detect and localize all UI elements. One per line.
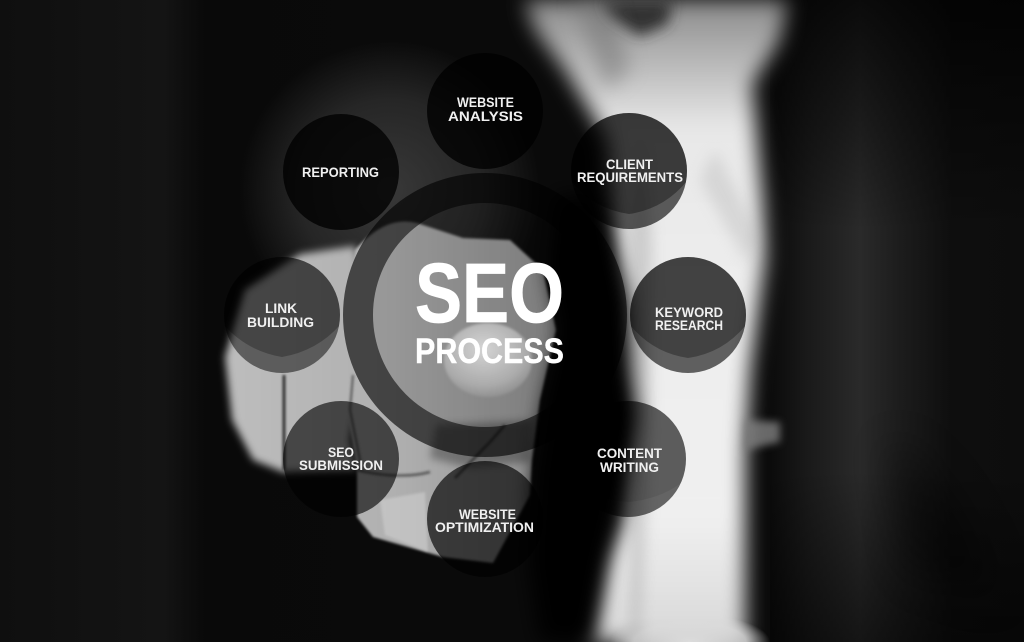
- label: keyword research: KEYWORD: [655, 305, 723, 320]
- label: website analysis: WEBSITE: [457, 95, 514, 110]
- label: link building: BUILDING: [247, 315, 314, 330]
- label: content writing: WRITING: [600, 460, 659, 475]
- bubble: reporting: [283, 114, 399, 230]
- label: link building: [247, 301, 314, 330]
- label: client requirements: [577, 157, 683, 185]
- bubble: content writing: [598, 401, 686, 517]
- blurred white shirt and collar: [524, 0, 788, 642]
- bubble: website optimization: [427, 461, 543, 577]
- label: website optimization: [435, 507, 534, 535]
- label: link building: LINK: [265, 301, 297, 316]
- label: seo submission: [299, 445, 383, 473]
- black sleeve shadow right of hand: [528, 195, 634, 642]
- label: website optimization: WEBSITE: [459, 507, 516, 522]
- label: keyword research: RESEARCH: [655, 318, 723, 333]
- label: website optimization: OPTIMIZATION: [435, 520, 534, 535]
- title: SEO PROCESS: SEO: [415, 246, 564, 340]
- central ring: inner disc: [373, 203, 597, 427]
- label: keyword research: [655, 305, 723, 333]
- label: seo submission: SUBMISSION: [299, 458, 383, 473]
- lower finger shade: [430, 420, 532, 468]
- icon: fingertip nail: [444, 323, 532, 397]
- label: reporting: REPORTING: [302, 165, 379, 180]
- label: content writing: CONTENT: [597, 446, 663, 461]
- label: website analysis: [448, 95, 523, 124]
- label: seo submission: SEO: [328, 445, 354, 460]
- label: client requirements: CLIENT: [606, 157, 654, 172]
- label: client requirements: REQUIREMENTS: [577, 170, 683, 185]
- label: website analysis: ANALYSIS: [448, 109, 523, 124]
- bubble: website analysis: [427, 53, 543, 169]
- bubble: seo submission: [283, 401, 399, 517]
- bubble: keyword research: [630, 257, 746, 373]
- title: SEO PROCESS: PROCESS: [415, 332, 564, 371]
- title: SEO PROCESS: [415, 246, 564, 371]
- central ring: outer dark band: [343, 173, 627, 457]
- pointing hand: [225, 222, 556, 563]
- bubble: client requirements: [571, 113, 687, 229]
- label: content writing: [597, 446, 663, 475]
- bubble: link building: [224, 257, 340, 373]
